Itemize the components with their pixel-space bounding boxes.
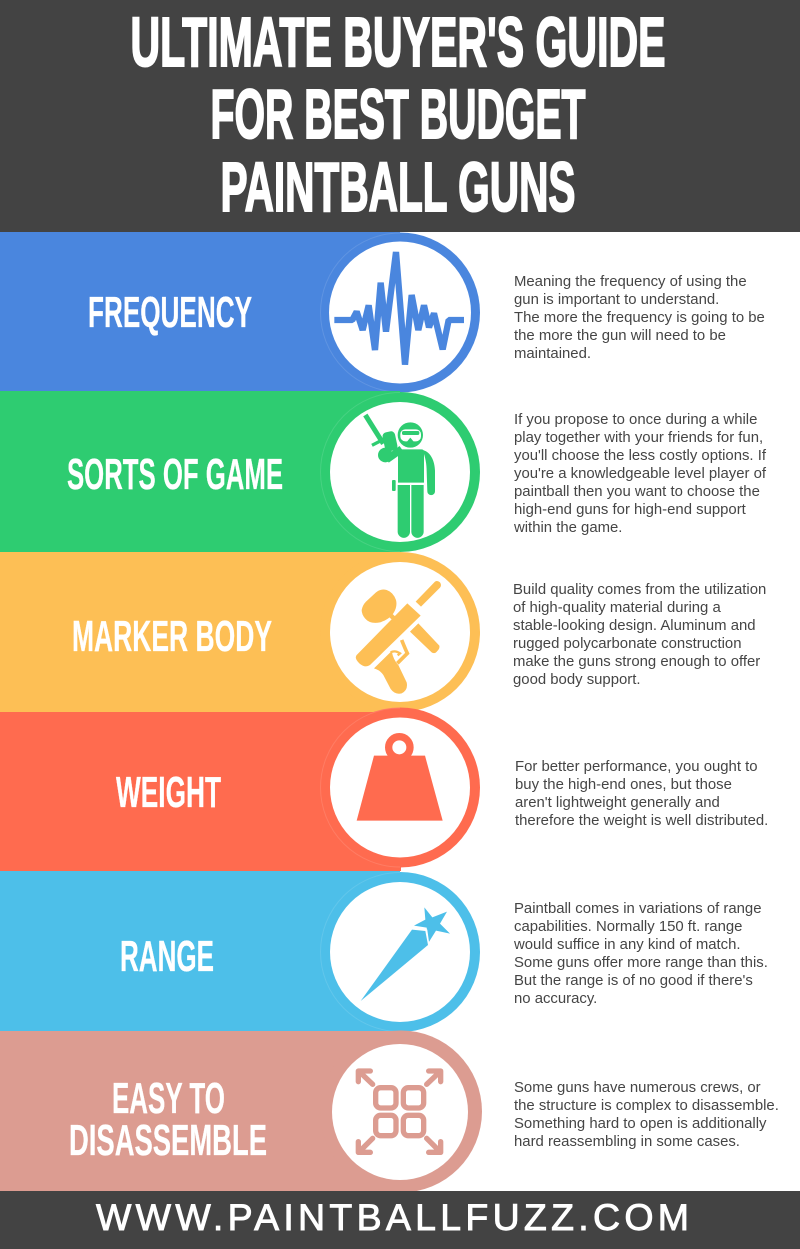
text: sorts of game: play together with your friends for fun,	[514, 430, 763, 446]
text: range: But the range is of no good if there's	[514, 973, 753, 989]
text: marker body: of high-quality material during a	[513, 600, 721, 616]
text: easy to disassemble: Some guns have numerous crews, or	[514, 1080, 761, 1096]
heading: weight: WEIGHT	[116, 769, 221, 817]
panel: frequency	[0, 232, 765, 392]
text: range: Some guns offer more range than this.	[514, 955, 768, 971]
icon: sound wave	[334, 252, 464, 365]
text: sorts of game: If you propose to once during a while	[514, 412, 757, 428]
text: marker body	[513, 582, 766, 688]
title	[130, 3, 666, 226]
heading: easy to disassemble: DISASSEMBLE	[69, 1117, 267, 1165]
heading: frequency: FREQUENCY	[88, 289, 252, 337]
text: weight	[515, 759, 768, 829]
heading: sorts of game: SORTS OF GAME	[67, 451, 283, 499]
footer panel	[0, 1191, 800, 1249]
text: sorts of game: paintball then you want to choose the	[514, 484, 760, 500]
text: weight: therefore the weight is well distributed.	[515, 813, 768, 829]
text: frequency: the more the gun will need to be	[514, 328, 726, 344]
panel: sorts of game	[0, 391, 767, 552]
text: weight: buy the high-end ones, but those	[515, 777, 732, 793]
text: frequency	[514, 274, 765, 362]
text: weight: For better performance, you ought to	[515, 759, 758, 775]
heading: easy to disassemble	[69, 1075, 267, 1165]
icon: expand grid	[358, 1071, 441, 1152]
heading: marker body: MARKER BODY	[72, 613, 272, 661]
footer url: WWW.PAINTBALLFUZZ.COM	[96, 1196, 689, 1238]
panel: marker body	[0, 552, 766, 712]
text: range: Paintball comes in variations of range	[514, 901, 761, 917]
text: sorts of game: you'll choose the less costly options. If	[514, 448, 767, 464]
text: sorts of game: high-end guns for high-end support	[514, 502, 747, 518]
icon: paintball marker	[356, 581, 441, 694]
header panel	[0, 0, 800, 232]
text: range: capabilities. Normally 150 ft. range	[514, 919, 742, 935]
text: range	[513, 901, 768, 1007]
panel: range	[0, 871, 768, 1032]
text: easy to disassemble: the structure is complex to disassemble.	[514, 1098, 779, 1114]
text: marker body: make the guns strong enough to offer	[513, 654, 760, 670]
icon: weight	[357, 737, 443, 821]
panel: weight	[0, 708, 768, 871]
panel: easy to disassemble	[0, 1030, 779, 1192]
text: sorts of game	[513, 412, 767, 536]
icon: shooting star	[361, 907, 450, 1001]
text: marker body: rugged polycarbonate construction	[513, 636, 741, 652]
text: sorts of game: you're a knowledgeable level player of	[514, 466, 767, 482]
text: marker body: good body support.	[513, 672, 640, 688]
text: easy to disassemble: hard reassembling in some cases.	[514, 1134, 740, 1150]
text: frequency: gun is important to understand.	[514, 292, 719, 308]
text: easy to disassemble: Something hard to open is additionally	[514, 1116, 767, 1132]
text: range: would suffice in any kind of match.	[513, 937, 741, 953]
heading: easy to disassemble: EASY TO	[112, 1075, 225, 1123]
text: range: no accuracy.	[514, 991, 597, 1007]
text: frequency: The more the frequency is going to be	[514, 310, 765, 326]
text: frequency: Meaning the frequency of using the	[514, 274, 747, 290]
icon: paintball player	[365, 415, 435, 538]
text: easy to disassemble	[514, 1080, 779, 1150]
text: frequency: maintained.	[514, 346, 591, 362]
text: marker body: stable-looking design. Aluminum and	[513, 618, 756, 634]
heading: range: RANGE	[120, 933, 214, 981]
text: marker body: Build quality comes from the utilization	[513, 582, 766, 598]
text: sorts of game: within the game.	[513, 520, 622, 536]
text: weight: aren't lightweight generally and	[515, 795, 720, 811]
